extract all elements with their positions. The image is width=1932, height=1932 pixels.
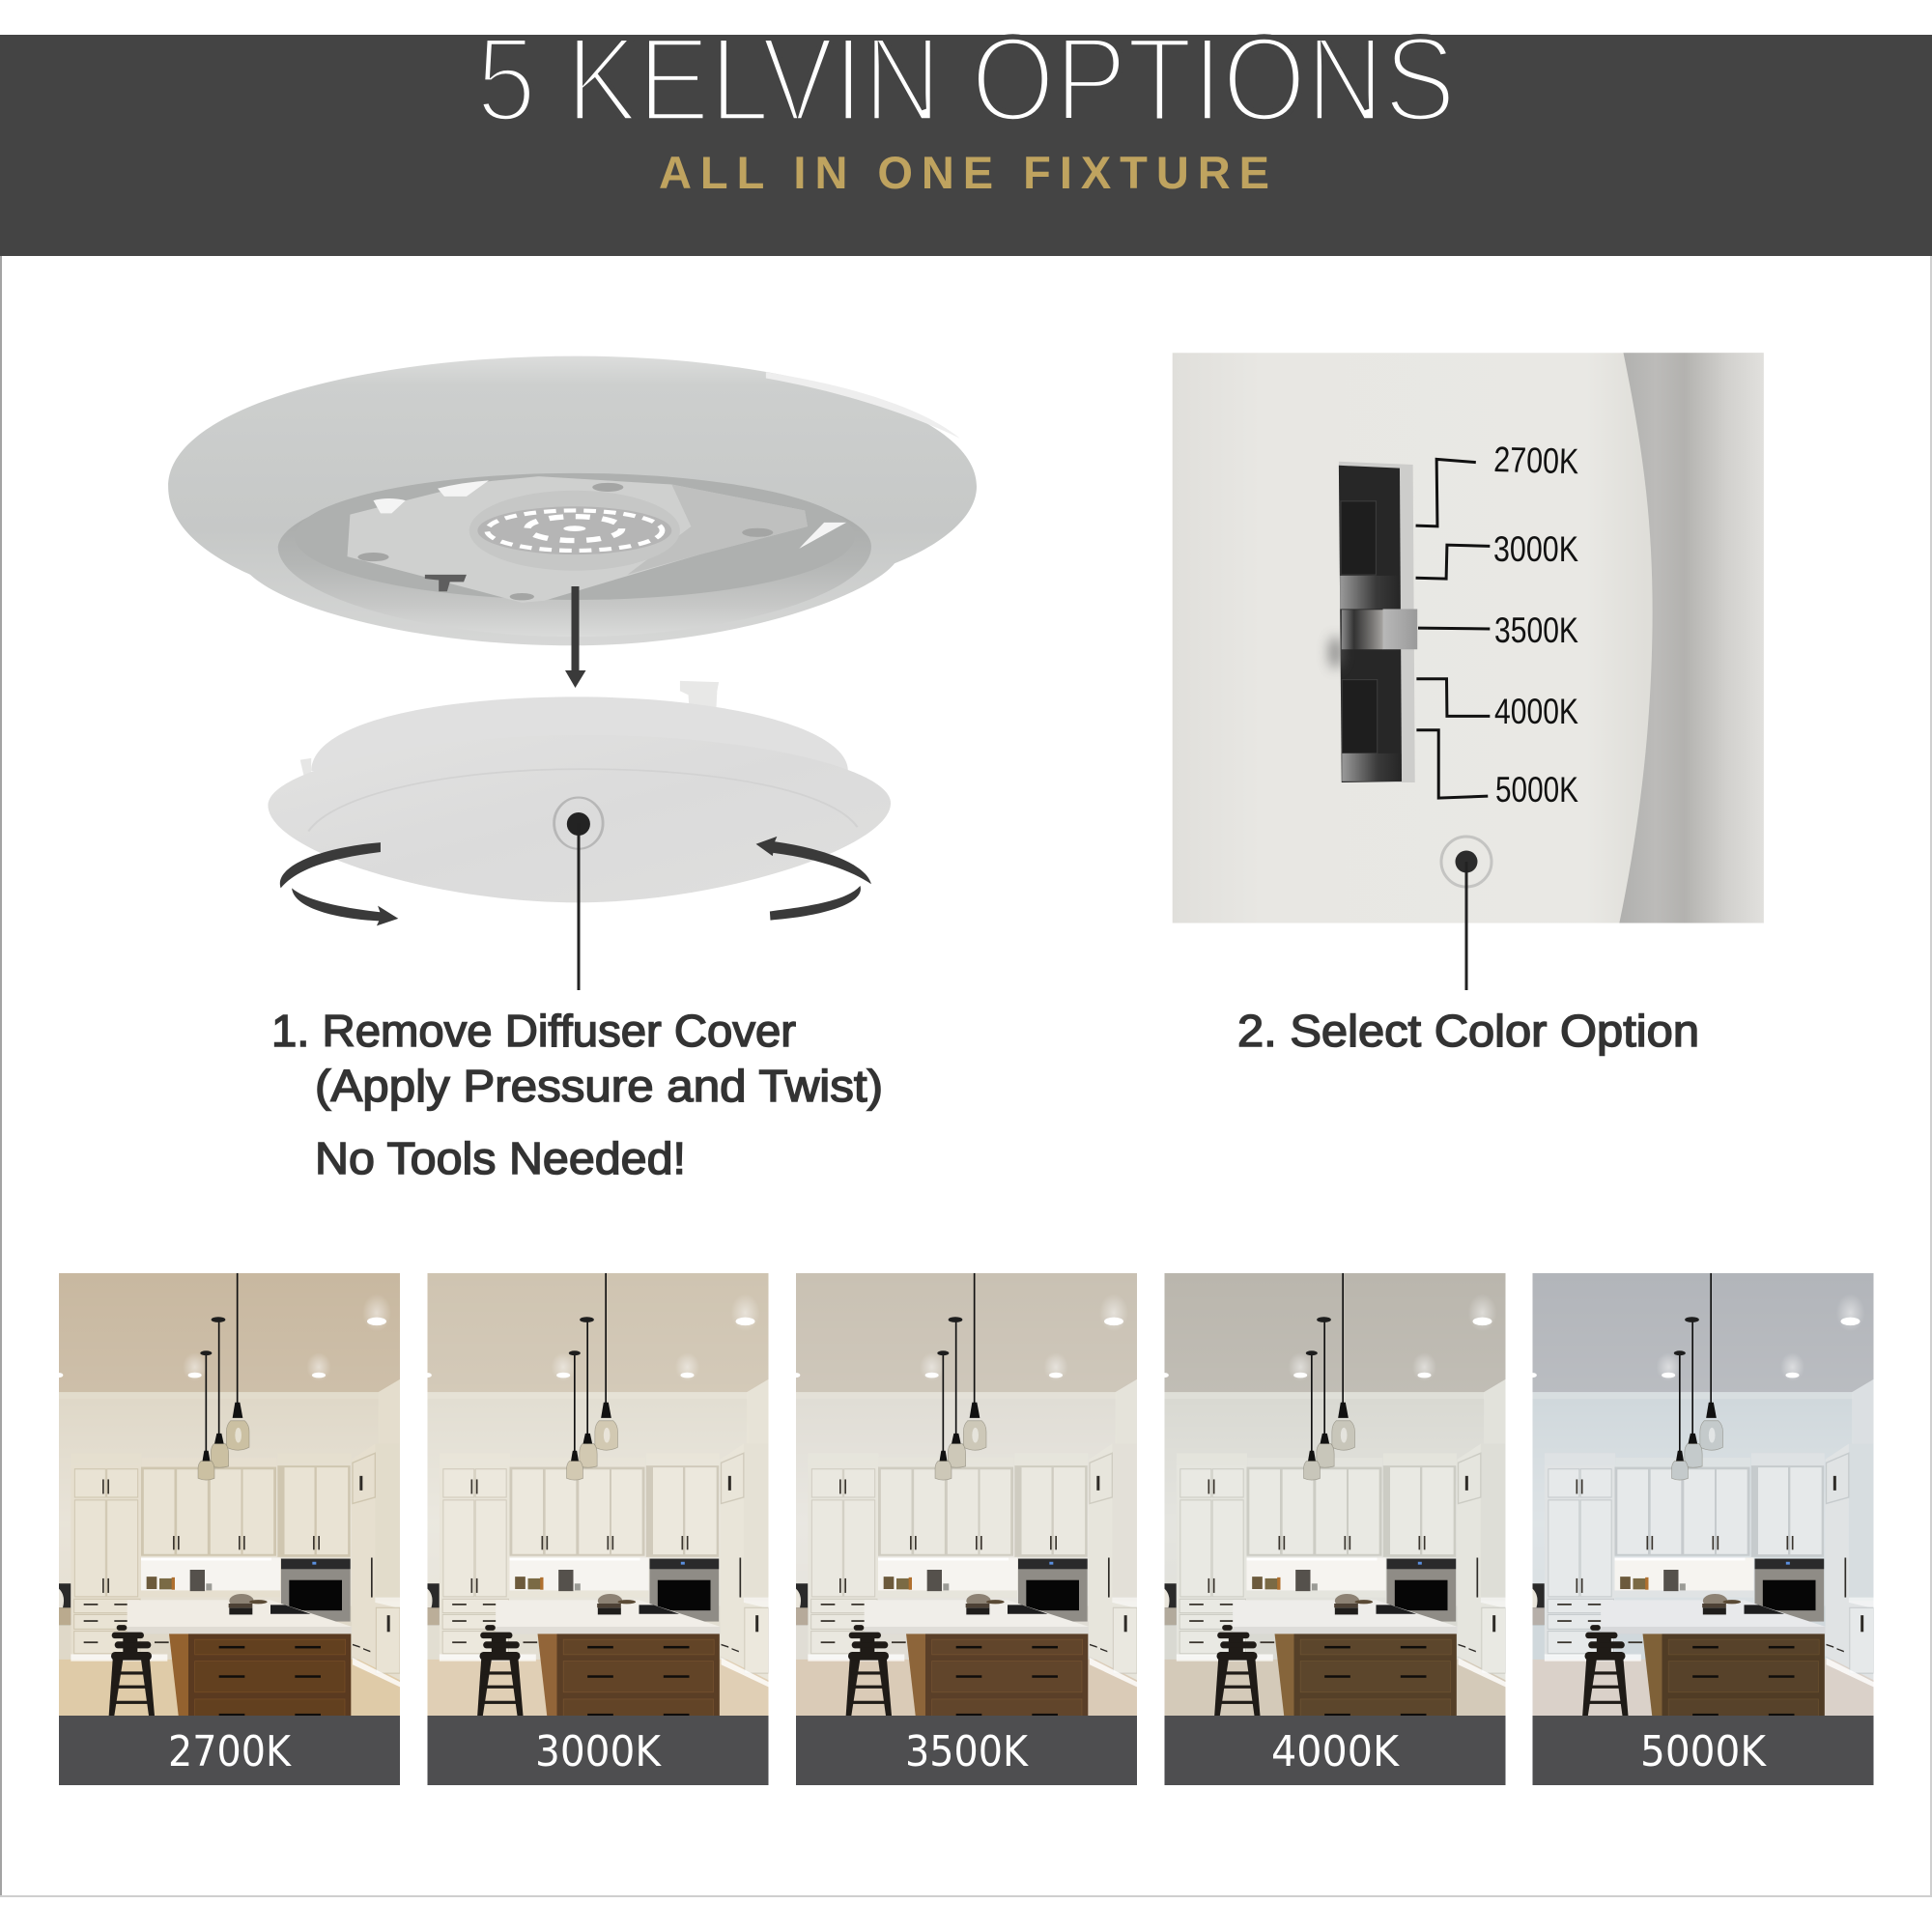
callout ring: step 2: [1441, 837, 1492, 887]
label bar: [1532, 1716, 1874, 1785]
card: 2700K: [55, 1273, 400, 1785]
arrow: twist right bottom: [770, 886, 861, 921]
clip tab: [680, 681, 719, 735]
card: 5000K: [1528, 1273, 1874, 1785]
photo: [423, 1273, 769, 1719]
step 1 text: 1. Remove Diffuser Cover: [271, 1006, 796, 1056]
callout dot: [567, 812, 590, 836]
step 2 text: 2. Select Color Option: [1237, 1006, 1699, 1056]
lower recess: [1342, 680, 1378, 753]
selector labels: 3500K: [1494, 611, 1578, 650]
slide switch: [1342, 609, 1417, 649]
photo: [1160, 1273, 1506, 1719]
photo: [55, 1273, 400, 1719]
title: 5 KELVIN OPTIONS: [476, 14, 1456, 147]
dome step line: [308, 769, 858, 831]
step 1 text: [271, 1006, 883, 1183]
label: 5000K: [1640, 1727, 1767, 1776]
selector labels: 3000K: [1493, 529, 1578, 569]
inner recess floor: [295, 473, 855, 600]
card: 3000K: [423, 1273, 769, 1785]
label bar: [427, 1716, 769, 1785]
mounting plate: [348, 476, 808, 603]
subtitle: ALL IN ONE FIXTURE: [659, 147, 1269, 198]
top edge highlight: [766, 372, 960, 439]
fixture rim: [1619, 353, 1764, 923]
label: 3500K: [905, 1727, 1029, 1776]
callout ring: [554, 798, 603, 849]
selector labels: [1493, 440, 1579, 810]
label: 4000K: [1271, 1727, 1400, 1776]
selector leader lines: [1416, 459, 1490, 798]
callout dot: step 2: [1455, 850, 1478, 873]
leader line: step 1: [578, 823, 580, 990]
diffuser dome: [268, 735, 891, 902]
switch shadow: [1329, 637, 1342, 668]
label bar: [59, 1716, 400, 1785]
side tab: [300, 758, 311, 779]
arrow: cover drops down: [565, 586, 585, 688]
screws: [357, 483, 773, 600]
T-slot: [425, 575, 467, 591]
photo: [792, 1273, 1137, 1719]
label: 2700K: [168, 1727, 292, 1776]
selector labels: 5000K: [1495, 770, 1578, 810]
step 1 text: No Tools Needed!: [315, 1133, 686, 1183]
header band: [0, 14, 1932, 256]
panel: selector switch close-up: [1173, 353, 1764, 923]
card: 4000K: [1160, 1273, 1506, 1785]
slot opening: [1339, 466, 1402, 782]
upper band: [1340, 576, 1400, 609]
card: 3500K: [792, 1273, 1137, 1785]
panel: open fixture illustration: [168, 356, 977, 645]
LED board: [469, 491, 680, 571]
fixture housing: [168, 356, 977, 645]
recessed rim: [278, 475, 871, 637]
label bar: [796, 1716, 1137, 1785]
lower band: [1342, 753, 1402, 781]
arrow: twist left bottom: [292, 888, 398, 925]
arrow: twist right top: [756, 837, 871, 884]
leader line: step 2: [1464, 862, 1468, 990]
upper recess: [1341, 501, 1376, 575]
diffuser base: [311, 696, 848, 771]
selector labels: 2700K: [1493, 440, 1579, 481]
cut-outs: [373, 480, 846, 549]
arrow: twist left top: [280, 842, 381, 888]
photo: [1528, 1273, 1874, 1719]
label bar: [1165, 1716, 1505, 1785]
step 1 text: (Apply Pressure and Twist): [315, 1061, 883, 1111]
selector labels: 4000K: [1494, 692, 1578, 731]
panel: diffuser cover: [268, 681, 891, 925]
plate shadow area: [627, 484, 808, 575]
slide slot: [1339, 462, 1415, 782]
label: 3000K: [535, 1727, 662, 1776]
